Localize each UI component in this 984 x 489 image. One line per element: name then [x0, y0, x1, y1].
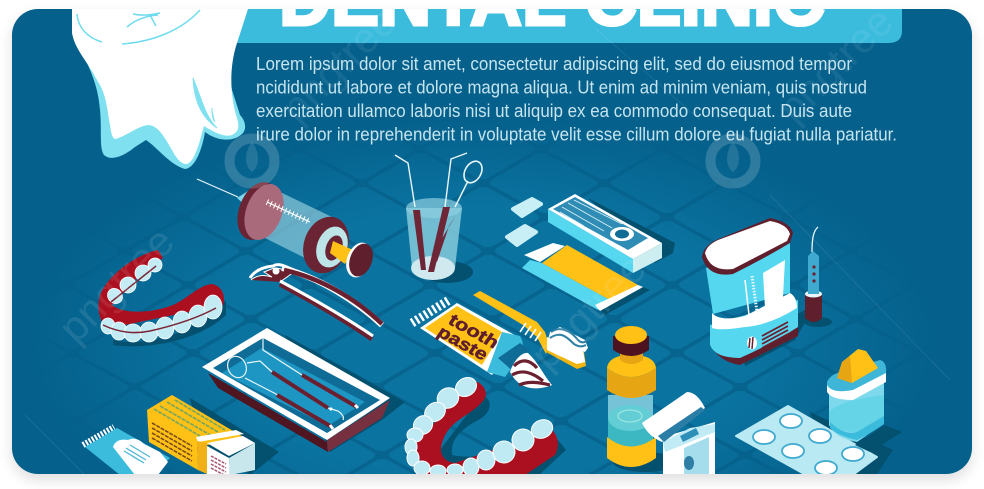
- icon: syringe: [197, 176, 377, 281]
- icon: flosser handle: [804, 227, 832, 327]
- icon: medicine box: [548, 194, 675, 273]
- label: tooth paste: tooth: [445, 310, 503, 352]
- icon: mouthwash bottle: [607, 326, 677, 472]
- label: tooth paste: [434, 310, 503, 364]
- icon: instrument tray: [202, 328, 405, 452]
- icon: gauze pads: [507, 199, 541, 245]
- icon: yellow carton: [147, 395, 279, 476]
- icon: jar with yellow cap: [827, 349, 902, 452]
- watermarks: pngtree: [521, 244, 655, 378]
- title banner: [230, 0, 902, 43]
- icon: dental floss box: [642, 392, 715, 474]
- icon: pill blister pack: [736, 406, 893, 480]
- icon: water flosser machine: [702, 218, 815, 366]
- body paragraph: [256, 53, 897, 144]
- icon: tooth: [72, 9, 248, 169]
- icon: toothbrush: [473, 291, 588, 369]
- watermarks: pngtree: [49, 217, 183, 351]
- icon: glass with dental tools: [395, 153, 486, 283]
- tiled floor: [104, 154, 860, 474]
- icon: small cream tube: [83, 427, 170, 475]
- icon: lower denture: [405, 374, 566, 477]
- icon: toothpaste tube: [412, 300, 552, 388]
- body paragraph: irure dolor in reprehenderit in voluptate velit esse cillum dolore eu fugiat nulla pariatur.: [256, 124, 897, 144]
- body paragraph: ncididunt ut labore et dolore magna aliqua. Ut enim ad minim veniam, quis nostrud: [256, 76, 867, 98]
- icon: dental braces model: [98, 250, 226, 346]
- body paragraph: Lorem ipsum dolor sit amet, consectetur adipiscing elit, sed do eiusmod tempor: [256, 53, 852, 74]
- body paragraph: exercitation ullamco laboris nisi ut aliquip ex ea commodo consequat. Duis aute: [256, 100, 852, 121]
- label: tooth paste: paste: [434, 322, 492, 364]
- icon: flat ointment tube: [522, 243, 650, 315]
- icon: dental pliers: [250, 265, 382, 339]
